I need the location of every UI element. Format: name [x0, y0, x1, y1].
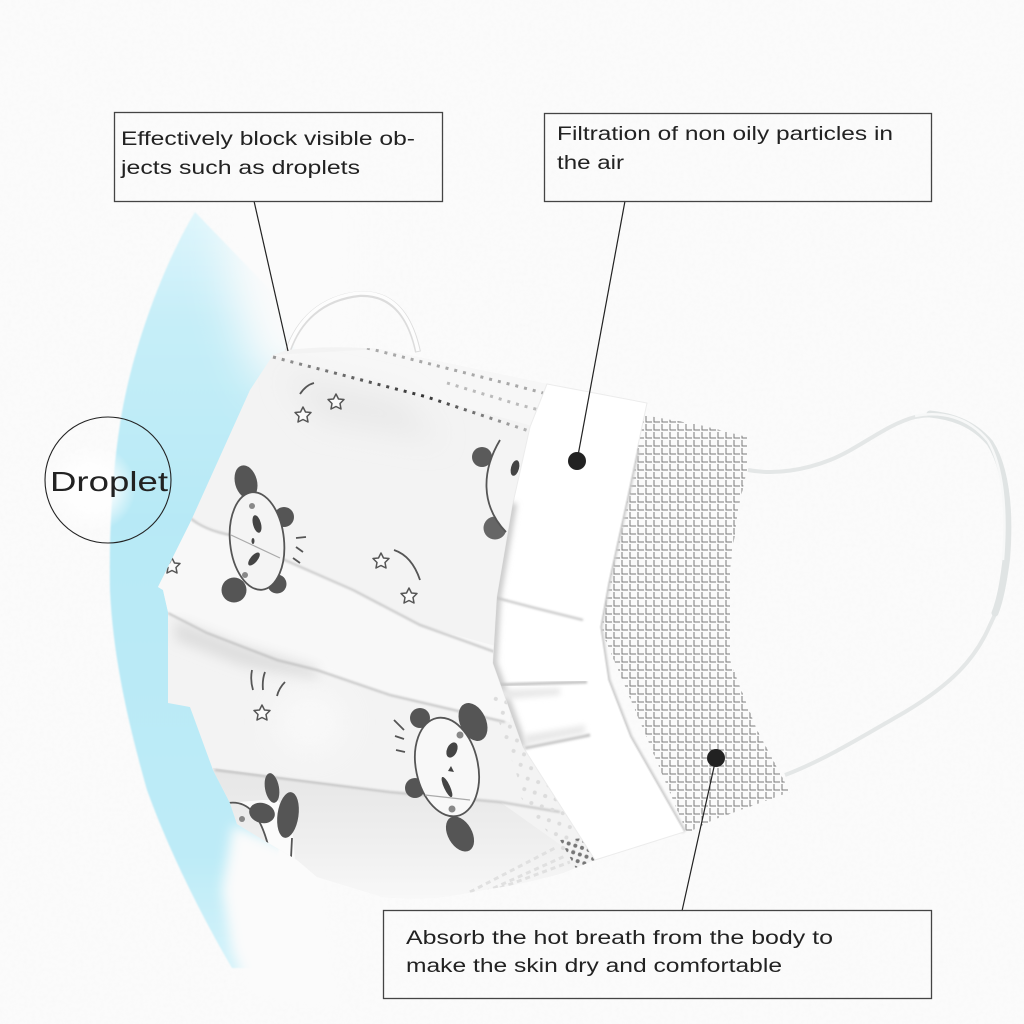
- blue droplet barrier crescent: [110, 175, 360, 1010]
- panda: lower right: [393, 703, 488, 852]
- white inner strip: [493, 384, 684, 860]
- panda: bottom left, cropped: [228, 772, 302, 860]
- shaded patch under stitching: [285, 375, 440, 440]
- mask outer layer: [150, 347, 610, 905]
- callout: filtration: Filtration of non oily particles in: [557, 124, 893, 145]
- diagonal seam ridges: [470, 848, 570, 892]
- strip crease shadows: [495, 598, 590, 748]
- dark perforation patch: [560, 838, 594, 868]
- callout: block droplets: [114, 112, 442, 202]
- fold band below second crease: [160, 615, 530, 815]
- leader: breath box: [682, 749, 725, 911]
- panda: upper left: [222, 463, 306, 602]
- callout: block droplets: jects such as droplets: [120, 158, 360, 179]
- leader: filtration box: [568, 201, 625, 470]
- inner mesh filter layer: [600, 415, 790, 833]
- strip left edge shade: [493, 503, 523, 747]
- droplet label circle: [45, 417, 171, 543]
- callout: block droplets: Effectively block visible ob-: [121, 129, 415, 150]
- top stitched band shade: [273, 349, 547, 430]
- droplet label circle: Droplet: [50, 466, 168, 497]
- second crease soft shadow: [175, 620, 317, 680]
- leader: droplets box: [254, 201, 288, 351]
- white fade at bottom of crescent: [222, 825, 340, 1010]
- soft edge shadow on mesh side: [600, 450, 684, 832]
- callout: hot breath: [384, 910, 932, 998]
- middle fold band: [158, 519, 192, 612]
- fold creases: [168, 518, 560, 812]
- soft highlight in lower panel: [274, 688, 346, 756]
- callout: hot breath: make the skin dry and comfortable: [406, 956, 782, 977]
- white fade at top of crescent: [222, 175, 360, 395]
- pale stitching lower band: [494, 696, 548, 796]
- lower fold shade: [213, 768, 508, 820]
- callout: hot breath: Absorb the hot breath from the body to: [406, 928, 833, 949]
- callout: filtration: [544, 114, 932, 202]
- callout: filtration: the air: [557, 153, 625, 174]
- perforated stitching: [273, 348, 547, 437]
- stars and marks: [164, 383, 420, 720]
- right ear loop: [748, 414, 1009, 775]
- top ear loop: [288, 293, 418, 352]
- panda: behind strip: [472, 440, 520, 540]
